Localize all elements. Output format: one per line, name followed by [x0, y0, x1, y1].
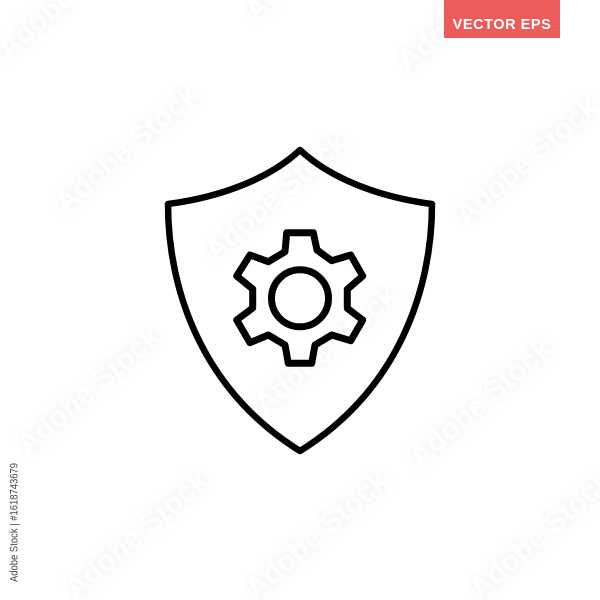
watermark pattern: Adobe Stock — [249, 279, 404, 420]
gear outline — [237, 233, 363, 363]
watermark pattern: Adobe Stock — [50, 78, 205, 219]
watermark pattern: Adobe Stock — [450, 90, 600, 231]
shield outline — [168, 150, 432, 451]
stock id text: Adobe Stock | #1618743679 — [8, 463, 20, 582]
watermark pattern: Adobe Stock — [12, 320, 167, 461]
watermark pattern: Adobe Stock — [404, 332, 559, 473]
badge: vector eps: VECTOR EPS — [453, 17, 551, 33]
gear centre ring — [272, 270, 328, 327]
watermark pattern: Adobe Stock — [199, 126, 354, 267]
badge: vector eps — [444, 0, 560, 38]
icon: shield with gear — [168, 150, 432, 451]
